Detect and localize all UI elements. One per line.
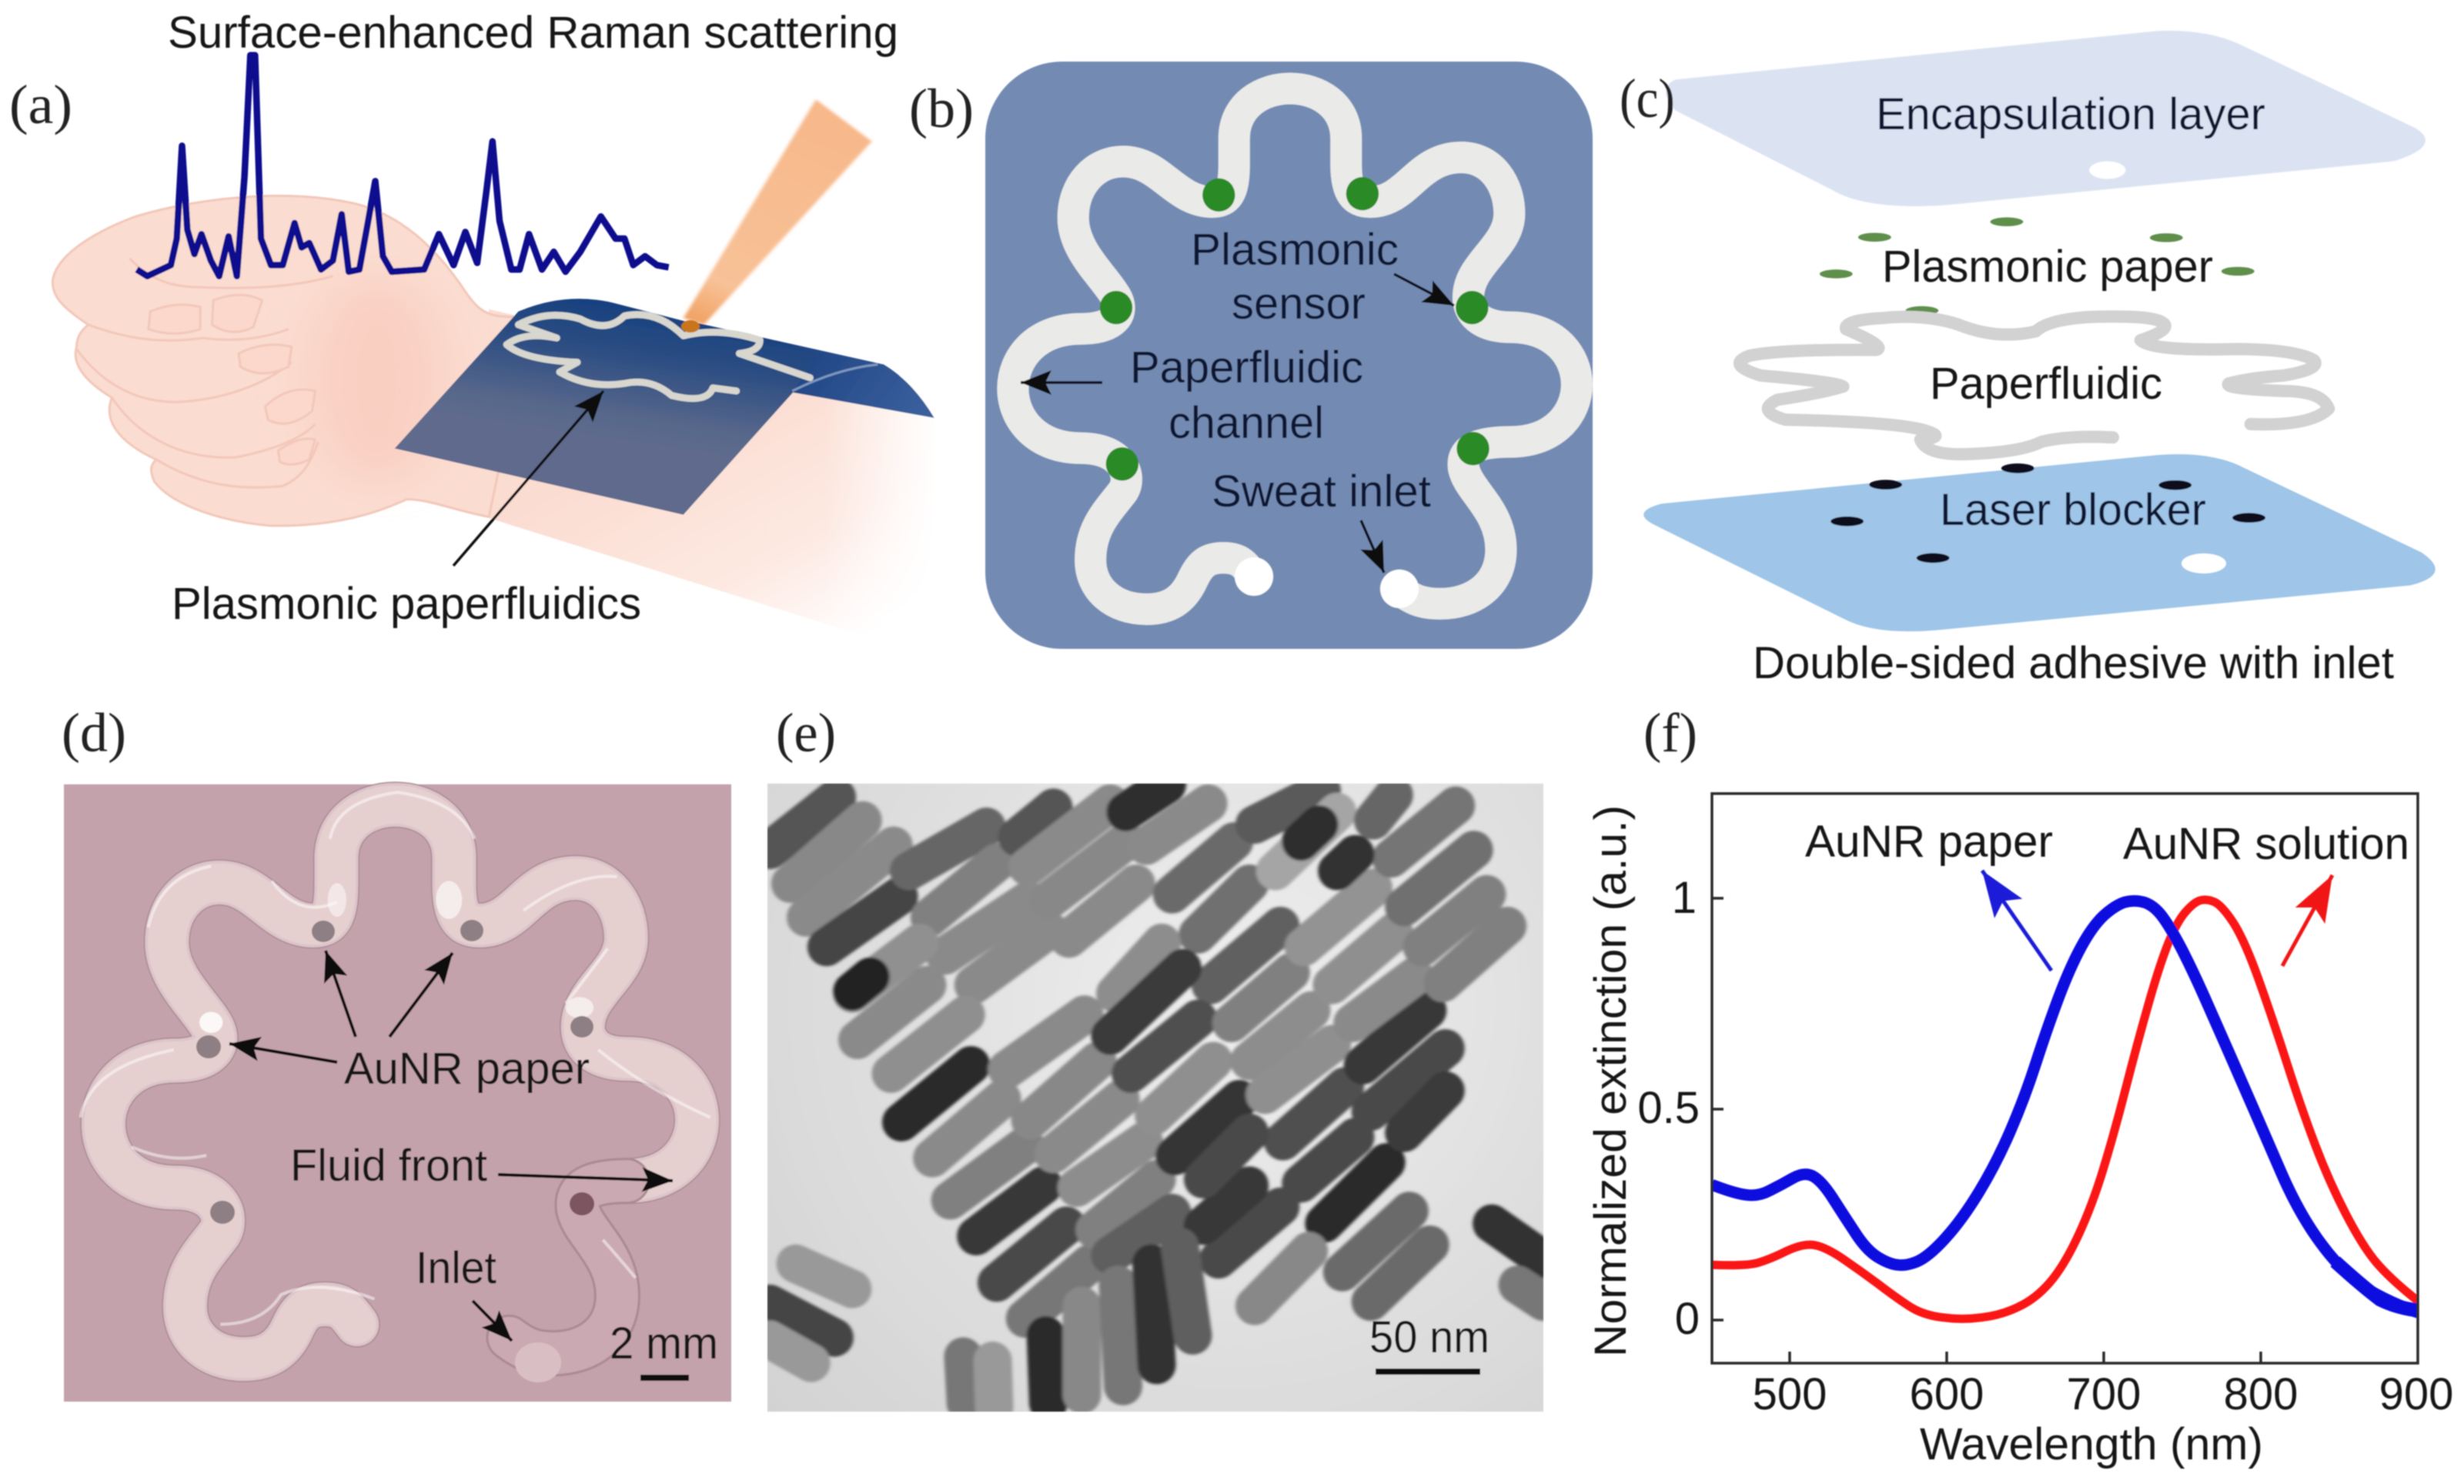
arrow to paperfluidics [453,391,603,566]
label: AuNR paper: AuNR paper [1805,817,2053,867]
sweat inlets [1235,557,1419,608]
label: Paperfluidic channel: Paperfluidic [1130,343,1363,393]
channel outline shadow [103,805,697,1359]
label: Inlet: Inlet [416,1243,496,1293]
spectral curves [1712,900,2418,1319]
label (a): (a) [9,74,72,135]
panel c: exploded layers [1620,31,2436,688]
x tick labels: 800 [2224,1369,2298,1419]
panel b: device layout [909,62,1593,649]
label: Plasmonic paperfluidics: Plasmonic paperfluidics [172,579,641,629]
device channel photo [103,805,697,1359]
chart axes and ticks [1712,794,2418,1363]
y tick labels: 1 [1672,873,1697,923]
x axis title: Wavelength (nm) [1920,1419,2263,1469]
hand fist [52,196,530,526]
forearm fade to white [824,376,948,650]
adhesive inlet hole [2181,553,2226,573]
title: Surface-enhanced Raman scattering: Surface-enhanced Raman scattering [168,8,898,58]
y tick labels: 0 [1675,1294,1700,1344]
blue curve: AuNR paper [1712,901,2418,1313]
finger lines [76,259,333,487]
y tick labels [1637,873,1700,1344]
paperfluidic channel [1013,89,1576,609]
label: Plasmonic sensor: sensor [1232,279,1366,329]
label (c): (c) [1620,68,1675,129]
x tick labels: 700 [2067,1369,2141,1419]
label: Laser blocker: Laser blocker [1940,485,2206,535]
arrows in panel d [229,951,673,1341]
arrows in panel b [1021,274,1454,573]
y axis title: Normalized extinction (a.u.) [1586,805,1636,1357]
label (e): (e) [776,702,836,764]
scale bar 50 nm [1376,1369,1480,1375]
label: Paperfluidic: Paperfluidic [1930,359,2162,409]
TEM background [767,784,1543,1412]
x tick labels: 500 [1753,1369,1827,1419]
panel f: extinction spectra chart [1586,702,2453,1469]
paperfluidic layer [1740,316,2329,454]
finger nails [149,295,315,465]
channel specular highlights [81,792,710,1324]
wetted channel outline [510,1181,627,1353]
noisy blue tail [2335,1262,2418,1310]
channel outer highlight [103,805,697,1359]
AuNR spots [196,920,594,1224]
plasmonic paper spots [1820,217,2255,315]
serpentine channel on band [507,315,810,399]
double-sided adhesive [1643,454,2436,631]
device substrate [985,62,1593,649]
encapsulation layer [1666,31,2426,206]
label: Plasmonic sensor [1191,225,1399,329]
channel fill [103,805,697,1359]
plasmonic sensors [1100,177,1489,481]
x tick labels: 900 [2379,1369,2453,1419]
label: Plasmonic sensor: Plasmonic [1191,225,1399,275]
label: Double-sided adhesive with inlet: Double-sided adhesive with inlet [1753,638,2394,688]
label (f): (f) [1643,702,1697,764]
laser blocker spots [1830,463,2265,563]
red curve: AuNR solution [1712,900,2418,1319]
label (d): (d) [62,702,126,764]
sensor glint [681,320,700,333]
forearm [471,309,942,638]
x tick labels: 600 [1910,1369,1984,1419]
panel d: device photo [62,702,731,1402]
label: AuNR paper: AuNR paper [344,1044,590,1094]
hand outline [52,196,530,526]
x tick labels [1753,1369,2453,1419]
scale bar 2 mm [640,1375,689,1381]
nanorod cluster [770,784,1543,1407]
panel a: wearable on wrist [9,8,948,650]
label: Encapsulation layer: Encapsulation layer [1876,89,2265,139]
label (b): (b) [909,78,974,139]
panel e: TEM image [767,702,1543,1412]
y tick labels: 0.5 [1637,1083,1700,1133]
label: AuNR solution: AuNR solution [2123,819,2409,869]
sensor band [395,299,819,515]
label: 50 nm: 50 nm [1369,1312,1489,1362]
label: Sweat inlet: Sweat inlet [1212,466,1431,516]
inlet blister [515,1342,561,1382]
curled band end [695,323,934,418]
SERS spectrum [137,55,669,276]
label: Fluid front: Fluid front [290,1141,487,1191]
laser beam [684,99,872,325]
label: Paperfluidic channel [1130,343,1363,448]
nanorods [770,784,1543,1407]
label: Plasmonic paper: Plasmonic paper [1882,242,2213,292]
blue arrow [1982,871,2051,971]
photo background [64,784,731,1402]
label: Paperfluidic channel: channel [1168,398,1324,448]
wetted channel section [510,1181,627,1353]
curl fold line [792,365,878,391]
palm shading [313,279,442,482]
label: 2 mm: 2 mm [610,1319,718,1369]
red arrow [2282,875,2332,966]
